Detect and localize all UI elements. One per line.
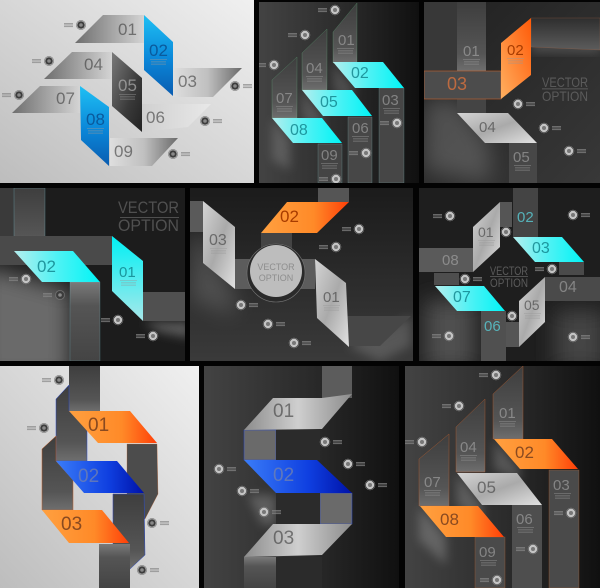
soft glow shadows [272, 62, 355, 170]
vector option label: OPTION [490, 276, 528, 290]
ribbon 04 [44, 52, 112, 79]
panel: orange five-step with vector option [424, 2, 600, 183]
vector option label: VECTOR [542, 74, 588, 90]
column 05 [509, 143, 537, 183]
ribbon 09 [110, 138, 178, 166]
panel: dark nine-step cyan columns [257, 2, 419, 184]
vector option label [118, 198, 179, 235]
lower right column [113, 494, 145, 569]
band 04: 04 [559, 279, 577, 296]
ribbon 01: 01 [118, 20, 137, 39]
orange 02: 02 [280, 207, 299, 226]
column 04: 04 [306, 60, 323, 77]
column 02: 02 [517, 209, 534, 226]
silver 01: 01 [323, 289, 340, 306]
column 02 [513, 188, 538, 237]
top connector [261, 188, 349, 253]
column 06 [481, 311, 506, 361]
soft glow shadows [419, 439, 520, 565]
circle vector option [247, 244, 305, 302]
circle vector option: OPTION [259, 273, 293, 283]
circle vector option: VECTOR [257, 262, 295, 272]
marker icons [27, 375, 169, 575]
marker icons [257, 5, 402, 184]
orange 02 [261, 202, 349, 233]
panel: silver and blue three-step [204, 366, 399, 588]
blue 02 [56, 461, 144, 493]
ribbon 01 [75, 15, 144, 43]
silver 05 [457, 473, 542, 505]
panel: orange nine-step columns [405, 366, 600, 588]
column 01: 01 [499, 405, 516, 422]
silver 03 [203, 201, 235, 289]
silver 04: 04 [479, 119, 496, 136]
orange 03: 03 [61, 514, 82, 535]
lower column [70, 282, 100, 361]
marker icons [2, 20, 252, 159]
ribbon 08 blue [80, 86, 109, 166]
marker icons [214, 437, 387, 517]
right connector [559, 262, 584, 275]
lower band [347, 316, 411, 346]
silver 04 [457, 113, 537, 143]
connector band [235, 259, 315, 289]
bottom column [244, 557, 322, 588]
orange 02 [494, 439, 578, 469]
silver 01 [315, 259, 349, 347]
cyan 07 [435, 286, 505, 311]
silver 01 [244, 394, 352, 430]
left connector [434, 273, 459, 285]
column 07: 07 [424, 474, 441, 491]
ribbon 06 pale [146, 104, 210, 127]
blue 02: 02 [78, 466, 99, 487]
column 09 [475, 537, 505, 588]
right band [143, 292, 185, 321]
left wrap upper [56, 385, 87, 461]
panel: eight-step pinwheel [419, 188, 600, 370]
silver 05 [519, 277, 545, 347]
band 03 [424, 71, 501, 99]
column 06 [348, 117, 372, 183]
lower glow [425, 300, 600, 370]
column 04: 04 [460, 439, 477, 456]
cyan 03: 03 [532, 240, 550, 257]
orange 02 [501, 18, 531, 99]
left panel strip [424, 2, 457, 71]
strip left [244, 430, 320, 460]
orange 03 [42, 510, 129, 543]
cyan 03 [513, 237, 584, 262]
column 09: 09 [479, 544, 496, 561]
vector option label: OPTION [118, 216, 179, 235]
orange 08 [420, 506, 504, 537]
cyan 08 [272, 118, 342, 143]
panel: light nine-step ribbon [0, 0, 254, 183]
column 03: 03 [553, 477, 570, 494]
column 03 [549, 470, 579, 588]
cyan 02: 02 [37, 257, 56, 276]
right dark column [113, 444, 158, 519]
top band [531, 18, 600, 50]
silver 05: 05 [524, 297, 540, 313]
band [0, 236, 112, 265]
cyan 05 [302, 90, 372, 116]
orange 01: 01 [88, 415, 109, 436]
ribbon 05 dark [112, 52, 142, 132]
cyan 05: 05 [320, 94, 338, 111]
column 04 [456, 399, 485, 472]
lower connector [506, 322, 519, 347]
marker icons [405, 370, 576, 585]
column 07: 07 [276, 90, 293, 107]
cyan 01 [112, 236, 143, 321]
marker icons [432, 210, 590, 342]
cyan 02 [333, 62, 404, 88]
glow [0, 265, 185, 361]
marker icons [513, 99, 586, 156]
panel: light orange and blue twist [0, 366, 199, 588]
bottom column [99, 544, 130, 588]
band 08: 08 [442, 252, 459, 269]
silver 01: 01 [478, 224, 494, 240]
vector option label [490, 264, 528, 290]
band 08 [419, 248, 473, 272]
blue 02: 02 [273, 465, 294, 486]
silver 03: 03 [209, 232, 227, 249]
ribbon 09: 09 [114, 142, 133, 161]
top column [14, 188, 46, 236]
marker icons [236, 224, 364, 348]
orange 02: 02 [515, 443, 534, 462]
column 09 [318, 144, 342, 183]
column 03 [379, 88, 404, 183]
column 01: 01 [338, 32, 355, 49]
cyan 07: 07 [453, 289, 471, 306]
ribbon 03: 03 [178, 72, 197, 91]
glow [190, 232, 411, 361]
column 01: 01 [463, 43, 480, 60]
column 06: 06 [352, 120, 369, 137]
ribbon 02 blue [144, 15, 173, 96]
ribbon 05 dark: 05 [118, 76, 137, 95]
marker icons [9, 274, 158, 341]
glow [248, 495, 276, 525]
ribbon 07 [12, 86, 80, 113]
orange 08: 08 [440, 510, 459, 529]
column 01 [333, 3, 357, 63]
left wrap lower [42, 436, 73, 510]
orange 01 [69, 411, 157, 443]
panel: orange three-step with circle [190, 188, 413, 361]
cyan 02: 02 [351, 65, 369, 82]
column 01 [493, 366, 523, 439]
ribbon 06 pale: 06 [146, 108, 165, 127]
silver 03 [244, 524, 352, 557]
silver 05: 05 [477, 478, 496, 497]
column 04 [302, 29, 327, 90]
vector option label: OPTION [542, 88, 588, 104]
top column [322, 366, 352, 398]
ribbon 04: 04 [84, 55, 103, 74]
strip right [276, 493, 352, 524]
ribbon 07: 07 [56, 89, 75, 108]
band 03: 03 [447, 74, 467, 94]
column 05: 05 [513, 149, 530, 166]
column 07 [419, 434, 449, 506]
left fade [0, 188, 14, 236]
column 06 [512, 505, 542, 588]
column 06: 06 [484, 318, 501, 335]
column 09: 09 [321, 147, 338, 164]
ribbon 08 blue: 08 [86, 110, 105, 129]
column 03: 03 [382, 92, 399, 109]
panel: cyan two-step with vector option [0, 188, 185, 361]
glow [424, 42, 600, 183]
orange 02: 02 [507, 42, 524, 59]
ribbon 02 blue: 02 [149, 41, 168, 60]
blue 02 [244, 460, 352, 493]
cyan 01: 01 [119, 264, 136, 281]
column 07 [272, 57, 297, 118]
cyan 08: 08 [290, 122, 308, 139]
top column [69, 366, 100, 411]
column 01 [457, 2, 486, 113]
silver 03: 03 [273, 528, 294, 549]
silver 01 [473, 202, 500, 272]
silver 01: 01 [273, 401, 294, 422]
left band [190, 201, 203, 232]
vector option label [542, 78, 588, 101]
vector option label: VECTOR [490, 264, 528, 278]
top band [500, 202, 512, 227]
ribbon 03 [173, 68, 242, 97]
column 06: 06 [516, 511, 533, 528]
vector option label: VECTOR [118, 198, 179, 217]
band 04 [545, 277, 600, 301]
cyan 02 [14, 251, 100, 282]
